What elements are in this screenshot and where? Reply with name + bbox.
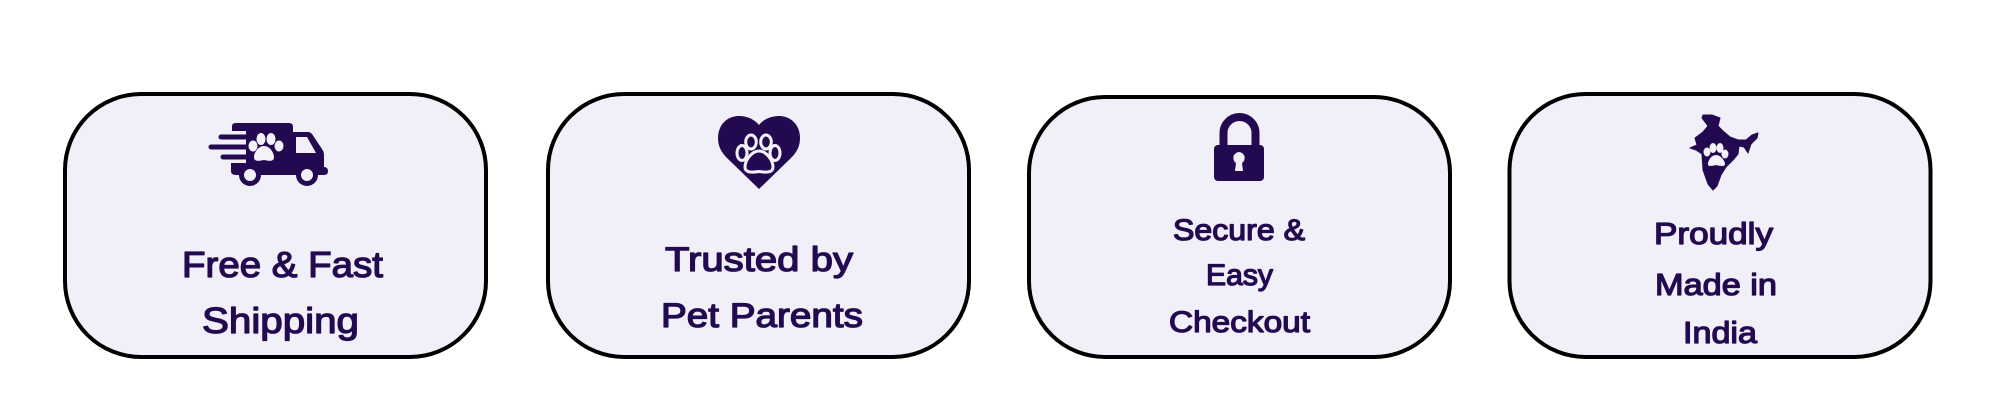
heading: easy: Easy bbox=[1206, 259, 1273, 292]
heading: proudly: Proudly bbox=[1654, 216, 1774, 251]
icon: padlock bbox=[1214, 117, 1264, 181]
heading: shipping: Shipping bbox=[202, 300, 359, 341]
heading: india: India bbox=[1683, 315, 1758, 350]
icon: heart with paw bbox=[718, 116, 800, 189]
panel: secure and easy checkout bbox=[1029, 97, 1450, 357]
panel: trusted by pet parents bbox=[548, 94, 969, 357]
heading: free and fast: Free & Fast bbox=[182, 244, 383, 285]
heading: pet parents: Pet Parents bbox=[661, 297, 863, 335]
icon: india map with paw bbox=[1690, 115, 1758, 190]
heading: checkout: Checkout bbox=[1169, 306, 1311, 339]
icon: delivery truck with paw bbox=[211, 123, 328, 186]
heading: secure and: Secure & bbox=[1173, 214, 1305, 247]
panel: free and fast shipping bbox=[65, 94, 486, 357]
heading: made in: Made in bbox=[1655, 267, 1777, 302]
panel: proudly made in india bbox=[1510, 94, 1930, 357]
heading: trusted by: Trusted by bbox=[665, 241, 853, 279]
